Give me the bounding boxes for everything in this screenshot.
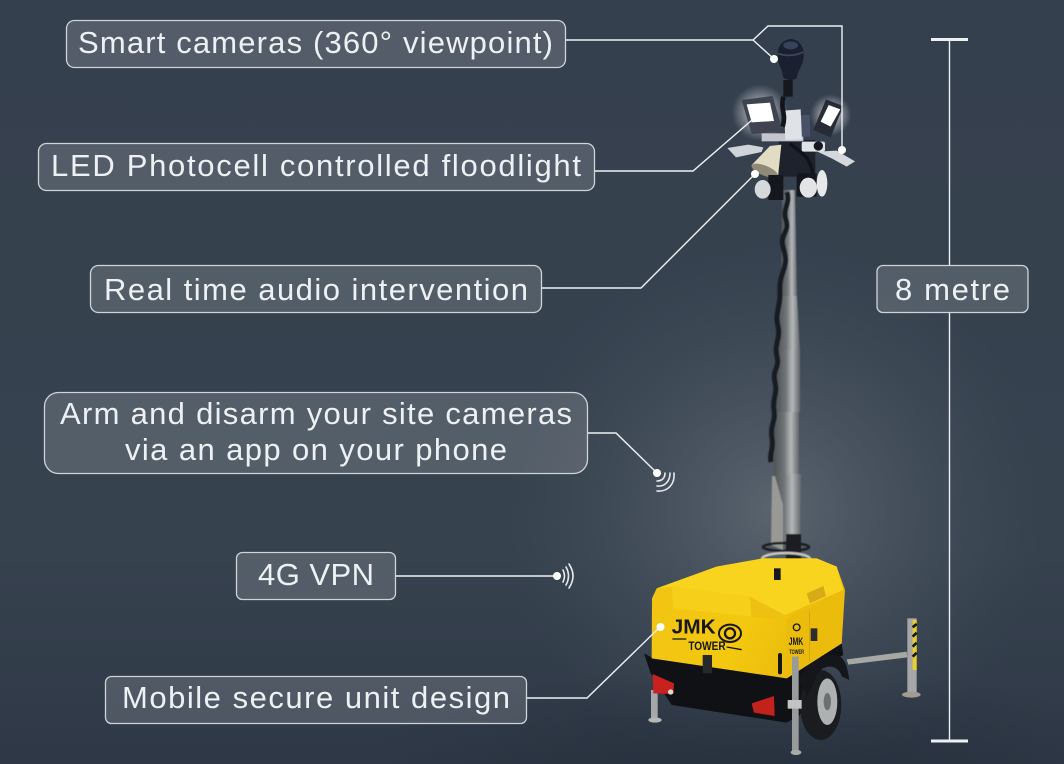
callout: mobile unit: Mobile secure unit design <box>122 680 510 715</box>
mast base bracket <box>774 568 781 580</box>
equipment housing <box>762 97 825 177</box>
logo: side JMK: TOWER <box>789 649 804 656</box>
callout: LED floodlight <box>38 120 752 190</box>
logo: side JMK: JMK <box>789 636 804 648</box>
callout: arm and disarm <box>44 392 674 491</box>
callout: 4G VPN <box>236 552 573 600</box>
logo: JMK Tower: TOWER <box>688 639 726 653</box>
icon: right floodlight <box>813 99 843 137</box>
rear left leg <box>648 690 662 723</box>
yellow body <box>652 558 845 678</box>
tower head: cameras, floodlights, horn <box>727 39 855 200</box>
front support leg <box>788 657 802 755</box>
height scale: 8 metre: 8 metre <box>895 272 1010 307</box>
callout: audio intervention <box>90 170 759 312</box>
logo: JMK Tower <box>672 615 742 653</box>
callout: LED floodlight: LED Photocell controlled floodlight <box>51 148 581 183</box>
icon: lower dome cameras <box>755 170 827 200</box>
icon: right bullet camera <box>817 151 855 167</box>
height scale: 8 metre <box>877 40 1028 741</box>
callout: 4G VPN: 4G VPN <box>258 557 374 592</box>
red tail lights <box>653 674 775 716</box>
tower mast <box>762 190 810 565</box>
icon: wifi waves diagonal <box>657 473 674 491</box>
wheel <box>798 655 849 740</box>
logo: JMK Tower: JMK <box>672 615 716 638</box>
icon: left bullet camera <box>727 145 763 157</box>
icon: left floodlight <box>742 96 783 134</box>
drawbar and jockey stand <box>847 618 921 698</box>
callout: audio intervention: Real time audio intervention <box>104 272 528 307</box>
lower black chassis <box>644 643 843 723</box>
generator trailer <box>644 558 921 755</box>
icon: wifi waves <box>563 564 573 588</box>
callout: smart cameras <box>66 20 846 154</box>
callout: arm and disarm: Arm and disarm your site cameras <box>60 396 572 431</box>
glow around floodlights <box>732 84 851 141</box>
callout: arm and disarm: via an app on your phone <box>125 432 507 467</box>
icon: dome camera <box>777 39 804 97</box>
icon: horn speaker <box>750 145 781 181</box>
callout: smart cameras: Smart cameras (360° viewpoint) <box>78 25 553 60</box>
callout: mobile unit <box>106 623 664 724</box>
logo: side JMK <box>789 624 804 656</box>
